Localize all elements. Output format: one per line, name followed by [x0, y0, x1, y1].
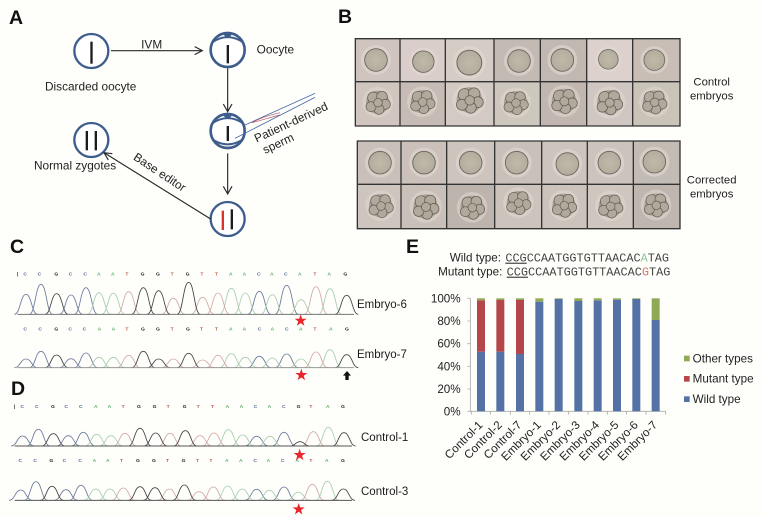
sequence letters: Embryo-6: A: [270, 272, 274, 278]
arrow: oocyte to sperm injection: [223, 68, 232, 112]
sequence letters: Embryo-6: G: [186, 272, 190, 278]
sequence letters: Embryo-6: T: [171, 272, 174, 278]
sequence letters: Control-1: A: [108, 404, 112, 410]
sequence letters: Embryo-7: A: [98, 326, 102, 332]
y axis: [431, 292, 666, 419]
chromatogram trace: Embryo-6: [14, 282, 358, 314]
sequence letters: Embryo-7: T: [125, 326, 128, 332]
sequence letters: Embryo-7: C: [285, 326, 289, 332]
sequence letters: Embryo-6: C: [83, 272, 87, 278]
label: control embryos: Control: [693, 76, 730, 88]
sequence letters: Control-3: C: [63, 458, 67, 464]
sequence letters: Embryo-6: T: [200, 272, 203, 278]
label: oocyte: Oocyte: [257, 42, 295, 56]
mutant type sequence: Mutant type:: [438, 266, 502, 279]
panel letter A: A: [9, 7, 23, 29]
label: discarded oocyte: Discarded oocyte: [45, 80, 137, 94]
label: control embryos: [690, 76, 734, 103]
sequence letters: Control-1: A: [268, 404, 272, 410]
y axis: 60%: [437, 338, 461, 351]
sequence letters: Control-3: A: [225, 458, 229, 464]
sequence letters: Embryo-7: G: [156, 326, 160, 332]
legend: Wild type: [693, 393, 741, 406]
sequence letters: Embryo-6: G: [156, 272, 160, 278]
sequence letters: Control-3: A: [106, 458, 110, 464]
sequence letters: Control-1: T: [211, 404, 214, 410]
arrow: base editor: [104, 153, 211, 219]
bars: mutant type: [477, 300, 524, 354]
panel letter D: D: [11, 378, 25, 400]
sequence letters: Control-3: C: [253, 458, 257, 464]
sequence letters: Control-3: A: [325, 458, 329, 464]
sequence letters: Embryo-7: T: [215, 326, 218, 332]
label: normal zygotes: Normal zygotes: [34, 158, 116, 172]
sequence letters: Embryo-7: T: [171, 326, 174, 332]
y axis: 20%: [437, 383, 461, 396]
x axis labels: Control-7: [481, 419, 524, 462]
x axis labels: Embryo-5: [577, 419, 621, 464]
sequence letters: Control-3: T: [196, 458, 199, 464]
icon: red star Control-1: [294, 449, 306, 460]
panel letter E: E: [406, 236, 419, 258]
sequence letters: Control-1: T: [122, 404, 125, 410]
sequence letters: Embryo-7: C: [23, 326, 27, 332]
sequence letters: Control-3: C: [281, 458, 285, 464]
sequence letters: Embryo-7: C: [68, 326, 72, 332]
sequence letters: Embryo-7: A: [229, 326, 233, 332]
stacked bar chart: [431, 292, 666, 464]
sequence letters: Embryo-6: A: [243, 272, 247, 278]
x axis labels: Embryo-6: [596, 419, 641, 464]
sequence letters: Embryo-7: T: [200, 326, 203, 332]
sequence letters: Embryo-6: G: [141, 272, 145, 278]
bars: other types: [477, 298, 660, 320]
label: corrected embryos: [687, 174, 737, 201]
icon: normal zygote: [74, 123, 108, 157]
panel letter C: C: [10, 236, 24, 258]
legend: Other types: [693, 352, 753, 365]
label: Control-3: Control-3: [361, 486, 408, 498]
sequence letters: Control-1: G: [297, 404, 301, 410]
wild type sequence: Wild type:: [450, 252, 501, 265]
sequence letters: Embryo-6: A: [97, 272, 101, 278]
label: IVM: IVM: [141, 37, 162, 51]
sequence letters: Control-3: G: [182, 458, 186, 464]
sequence letters: Embryo-7: C: [258, 326, 262, 332]
sequence letters: Embryo-7: G: [345, 326, 349, 332]
sequence letters: Control-1: C: [79, 404, 83, 410]
label: Control-1: Control-1: [361, 432, 408, 444]
panel A: workflow diagram: [34, 32, 330, 236]
sequence letters: Embryo-6: T: [313, 272, 316, 278]
sequence letters: Control-1: T: [167, 404, 170, 410]
legend: [684, 352, 754, 406]
chromatogram trace: Control-3: [9, 481, 355, 500]
sequence letters: Embryo-6: C: [38, 272, 42, 278]
sequence letters: Embryo-7: A: [271, 326, 275, 332]
panel B: embryo micrographs: [355, 39, 737, 229]
bars: wild type: [477, 299, 660, 411]
sequence letters: Control-3: T: [166, 458, 169, 464]
sequence letters: Control-1: C: [282, 404, 286, 410]
sequence letters: Control-3: G: [152, 458, 156, 464]
icon: discarded oocyte: [74, 34, 108, 68]
sequence letters: Control-1: G: [153, 404, 157, 410]
label: base editor: Base editor: [131, 150, 189, 195]
sequence letters: Embryo-6: C: [23, 272, 27, 278]
label: patient-derived sperm: sperm: [260, 130, 296, 157]
sequence letters: Control-3: G: [341, 458, 345, 464]
x axis labels: Embryo-2: [518, 419, 563, 464]
label: Embryo-7: Embryo-7: [357, 349, 407, 361]
y axis: 0%: [444, 406, 461, 419]
y axis: 80%: [437, 315, 461, 328]
panel D: control chromatograms: [9, 404, 356, 514]
sequence letters: Control-1: A: [326, 404, 330, 410]
label: control embryos: embryos: [690, 91, 734, 103]
sequence letters: Control-1: G: [341, 404, 345, 410]
sequence letters: Embryo-7: A: [112, 326, 116, 332]
sequence letters: Control-3: G: [136, 458, 140, 464]
x axis labels: Embryo-4: [557, 418, 602, 464]
sequence letters: Embryo-7: G: [186, 326, 190, 332]
sequence letters: Embryo-6: C: [284, 272, 288, 278]
sequence letters: Control-1: A: [240, 404, 244, 410]
icon: black up arrow: [343, 371, 351, 380]
x axis labels: Control-2: [462, 419, 505, 462]
sequence letters: Control-3: C: [33, 458, 37, 464]
sequence letters: Embryo-7: A: [329, 326, 333, 332]
sequence letters: Embryo-6: T: [215, 272, 218, 278]
panel letter B: B: [338, 6, 352, 28]
sequence letters: Control-1: G: [183, 404, 187, 410]
sequence letters: Embryo-6: G: [343, 272, 347, 278]
label: corrected embryos: Corrected: [687, 174, 737, 186]
y axis: 40%: [437, 360, 461, 373]
x axis labels: Embryo-1: [499, 419, 544, 464]
sequence letters: Embryo-7: T: [313, 326, 316, 332]
sequence letters: Control-1: C: [35, 404, 39, 410]
sequence letters: Control-1: G: [51, 404, 55, 410]
sequence letters: Control-3: A: [267, 458, 271, 464]
x axis labels: Embryo-3: [538, 419, 583, 464]
arrow: injection to mutant zygote: [223, 153, 232, 194]
icon: red star Control-3: [293, 503, 305, 514]
sequence letters: Embryo-6: C: [257, 272, 261, 278]
sequence letters: Control-1: C: [64, 404, 68, 410]
sequence letters: Control-1: A: [94, 404, 98, 410]
icon: oocyte: [211, 32, 245, 67]
sequence letters: Control-1: T: [309, 404, 312, 410]
mutant type sequence: CCGCCAATGGTGTTAACACGTAG: [507, 266, 670, 280]
sequence letters: Control-1: A: [226, 404, 230, 410]
y axis: 100%: [431, 292, 461, 305]
icon: mutant zygote: [211, 202, 245, 236]
icon: red star Embryo-7: [295, 369, 307, 380]
chromatogram trace: Control-1: [11, 427, 356, 446]
sequence letters: Embryo-6: A: [298, 272, 302, 278]
sequence letters: Embryo-6: C: [69, 272, 73, 278]
x axis labels: Control-1: [442, 419, 485, 462]
legend: Mutant type: [693, 373, 754, 386]
sequence letters: Embryo-6: A: [327, 272, 331, 278]
sequence letters: Control-3: G: [49, 458, 53, 464]
wild type sequence: CCGCCAATGGTGTTAACACATAG: [505, 252, 669, 266]
control embryos image grid: [355, 39, 680, 126]
sequence letters: Embryo-6: |: [17, 272, 19, 278]
sequence letters: Control-3: T: [209, 458, 212, 464]
x axis labels: Embryo-7: [615, 419, 660, 464]
sequence letters: Control-1: C: [254, 404, 258, 410]
sequence letters: Control-1: |: [14, 404, 16, 410]
sequence letters: Control-3: T: [309, 458, 312, 464]
sequence letters: Control-3: C: [78, 458, 82, 464]
sequence letters: Control-3: T: [120, 458, 123, 464]
sequence letters: Embryo-6: A: [111, 272, 115, 278]
sequence letters: Embryo-7: G: [54, 326, 58, 332]
icon: fertilised oocyte: [211, 113, 245, 148]
sequence letters: Embryo-6: A: [229, 272, 233, 278]
arrow: IVM: [111, 47, 202, 55]
sequence letters: Control-3: A: [93, 458, 97, 464]
sequence letters: Embryo-7: C: [38, 326, 42, 332]
icon: red star Embryo-6: [295, 314, 307, 326]
sequence letters: Embryo-6: T: [125, 272, 128, 278]
chromatogram trace: Embryo-7: [14, 350, 358, 368]
x axis labels: [442, 418, 660, 464]
sequence letters: Control-1: G: [137, 404, 141, 410]
sequence letters: Control-3: A: [295, 458, 299, 464]
corrected embryos image grid: [357, 141, 680, 229]
sequence letters: Control-3: A: [239, 458, 243, 464]
label: Embryo-6: Embryo-6: [357, 299, 407, 311]
sequence letters: Embryo-7: A: [299, 326, 303, 332]
panel C: embryo chromatograms: [14, 272, 358, 380]
sequence letters: Embryo-7: C: [83, 326, 87, 332]
sequence letters: Control-1: T: [197, 404, 200, 410]
panel E: sequences and stacked bar chart: [431, 252, 754, 464]
sequence letters: Embryo-7: A: [243, 326, 247, 332]
sequence letters: Control-3: C: [18, 458, 22, 464]
icon: sperm injection pipette: [235, 93, 315, 138]
sequence letters: Embryo-7: G: [141, 326, 145, 332]
sequence letters: Embryo-6: G: [54, 272, 58, 278]
sequence letters: Control-1: C: [20, 404, 24, 410]
label: patient-derived sperm: Patient-derived: [252, 99, 330, 145]
label: corrected embryos: embryos: [690, 189, 734, 201]
